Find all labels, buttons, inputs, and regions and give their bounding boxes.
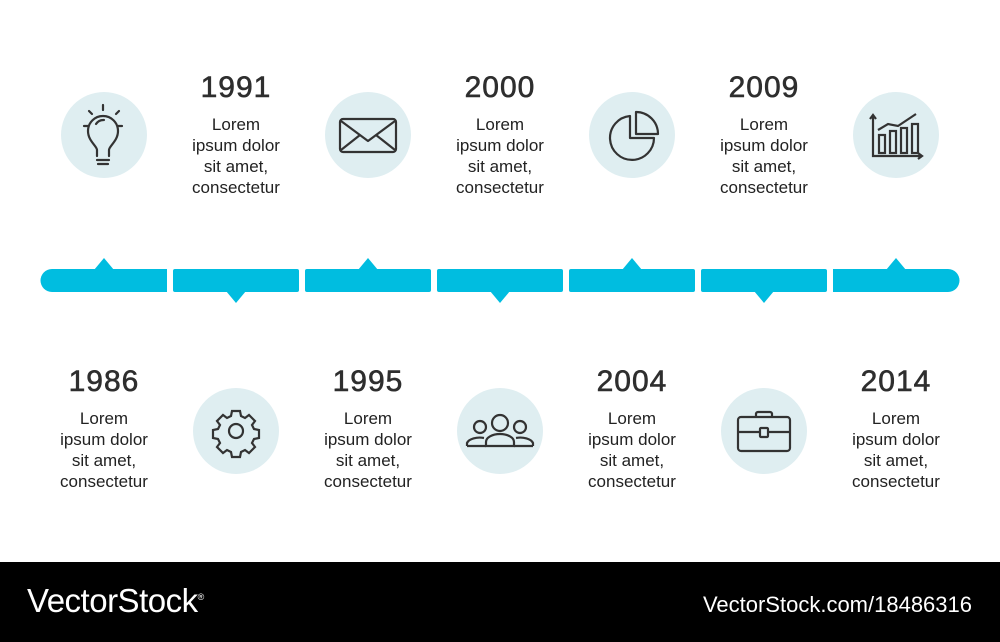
text: 2000 bbox=[456, 71, 544, 197]
icon: gear bbox=[193, 388, 279, 474]
text: 2000: sit amet, bbox=[468, 157, 532, 176]
text: 1991 bbox=[192, 71, 280, 197]
text: 2004: ipsum dolor bbox=[588, 430, 676, 449]
text: 2000: consectetur bbox=[456, 178, 544, 197]
icon: bar chart bbox=[853, 92, 939, 178]
text: 2004: Lorem bbox=[608, 409, 656, 428]
text: 1995 bbox=[324, 365, 412, 491]
text: 2014: ipsum dolor bbox=[852, 430, 940, 449]
text: 2009: consectetur bbox=[720, 178, 808, 197]
footer logo: VectorStock® bbox=[27, 582, 204, 619]
text: 1986: sit amet, bbox=[72, 451, 136, 470]
text: 1995: 1995 bbox=[333, 365, 403, 398]
text: 1995: sit amet, bbox=[336, 451, 400, 470]
timeline bar bbox=[40, 258, 960, 303]
text: 2014 bbox=[852, 365, 940, 491]
icon: briefcase bbox=[721, 388, 807, 474]
text: 2014: Lorem bbox=[872, 409, 920, 428]
text: 1991: sit amet, bbox=[204, 157, 268, 176]
text: 1986: ipsum dolor bbox=[60, 430, 148, 449]
icon: pie chart bbox=[589, 92, 675, 178]
footer bbox=[0, 562, 1000, 642]
text: 2009: sit amet, bbox=[732, 157, 796, 176]
text: 1986: 1986 bbox=[69, 365, 139, 398]
text: 1995: consectetur bbox=[324, 472, 412, 491]
text: 1991: Lorem bbox=[212, 115, 260, 134]
text: 2014: consectetur bbox=[852, 472, 940, 491]
text: 1986 bbox=[60, 365, 148, 491]
text: 1995: ipsum dolor bbox=[324, 430, 412, 449]
text: 1991: 1991 bbox=[201, 71, 271, 104]
text: 1986: Lorem bbox=[80, 409, 128, 428]
text: 2009: 2009 bbox=[729, 71, 799, 104]
text: 2004: 2004 bbox=[597, 365, 667, 398]
text: 1991: consectetur bbox=[192, 178, 280, 197]
text: 2009: ipsum dolor bbox=[720, 136, 808, 155]
text: 2014: sit amet, bbox=[864, 451, 928, 470]
text: 2014: 2014 bbox=[861, 365, 931, 398]
footer url: VectorStock.com/18486316 bbox=[703, 592, 972, 617]
text: 2000: 2000 bbox=[465, 71, 535, 104]
text: 2009 bbox=[720, 71, 808, 197]
text: 2000: ipsum dolor bbox=[456, 136, 544, 155]
text: 2009: Lorem bbox=[740, 115, 788, 134]
icon: envelope bbox=[325, 92, 411, 178]
text: 1995: Lorem bbox=[344, 409, 392, 428]
text: 1991: ipsum dolor bbox=[192, 136, 280, 155]
text: 1986: consectetur bbox=[60, 472, 148, 491]
text: 2000: Lorem bbox=[476, 115, 524, 134]
icon: people bbox=[457, 388, 543, 474]
icon: light bulb bbox=[61, 92, 147, 178]
text: 2004 bbox=[588, 365, 676, 491]
text: 2004: sit amet, bbox=[600, 451, 664, 470]
text: 2004: consectetur bbox=[588, 472, 676, 491]
